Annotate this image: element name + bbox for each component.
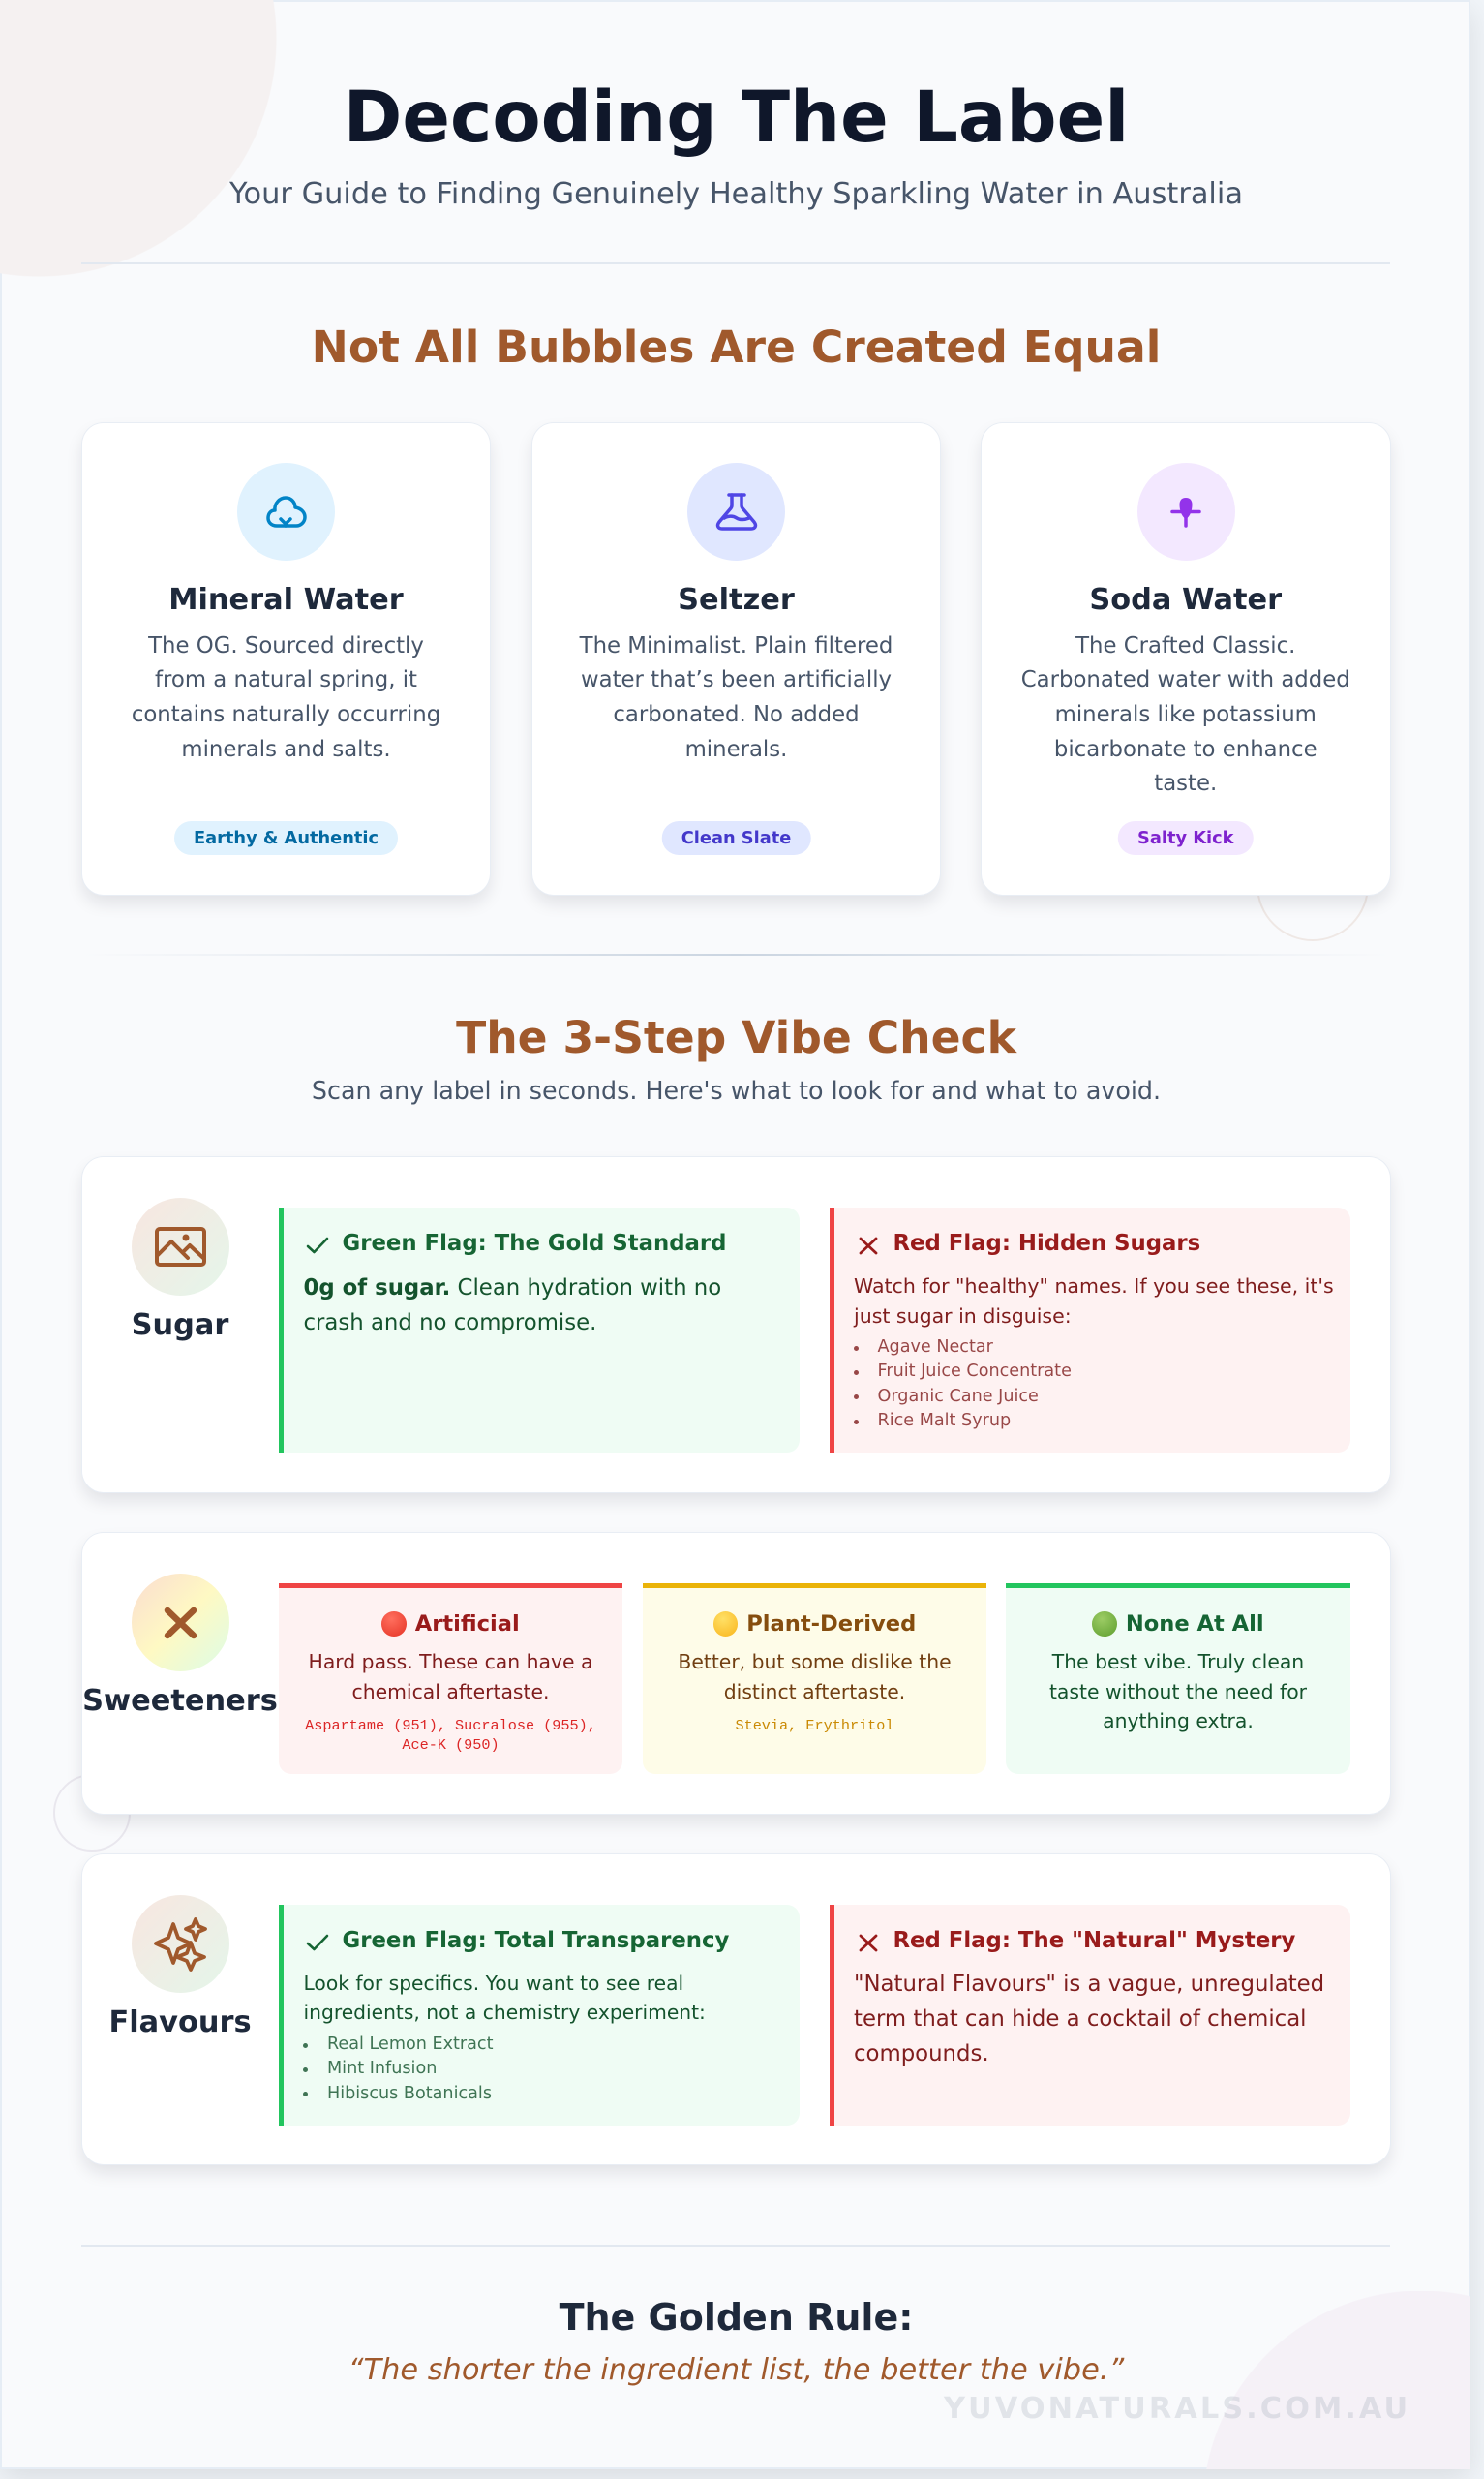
- icon: soda: [1136, 463, 1235, 561]
- row label: Sugar: [132, 1307, 228, 1342]
- flag text: [304, 1972, 706, 2024]
- section intro: Scan any label in seconds. Here's what to look for and what to avoid.: [312, 1076, 1161, 1105]
- card description: contains naturally occurring: [132, 702, 440, 727]
- flag text: 0g of sugar. Clean hydration with no: [304, 1275, 721, 1301]
- card description: [132, 633, 440, 762]
- icon: cross: [860, 1935, 877, 1952]
- flag text: [854, 1972, 1324, 2066]
- row label: Flavours: [108, 2005, 252, 2039]
- icon: cross: [132, 1574, 229, 1671]
- list: Hibiscus Botanicals: [327, 2084, 492, 2103]
- sub text: anything extra.: [1103, 1709, 1254, 1732]
- card title: Seltzer: [678, 583, 795, 616]
- tag: [174, 821, 398, 855]
- card description: water that’s been artificially: [581, 667, 892, 692]
- list: Fruit Juice Concentrate: [877, 1362, 1072, 1381]
- list: [854, 1337, 1072, 1430]
- decorative ring left: [52, 1774, 130, 1852]
- flag title: Green Flag: The Gold Standard: [343, 1231, 726, 1256]
- card description: minerals like potassium: [1055, 702, 1317, 727]
- card description: from a natural spring, it: [155, 667, 417, 692]
- list: [303, 2035, 494, 2103]
- icon: sparkles: [132, 1895, 229, 1993]
- panel: sugar: [82, 1157, 1390, 1492]
- tag: [661, 821, 811, 855]
- flag text: crash and no compromise.: [304, 1310, 596, 1335]
- flag text: Watch for "healthy" names. If you see these, it's: [854, 1274, 1334, 1298]
- icon: cloud: [237, 463, 335, 561]
- icon: check: [306, 1238, 329, 1253]
- list: Organic Cane Juice: [877, 1387, 1039, 1406]
- sub text: chemical aftertaste.: [352, 1680, 549, 1703]
- flag text: compounds.: [854, 2041, 989, 2066]
- tag: Salty Kick: [1137, 828, 1233, 848]
- plant-derived: [643, 1583, 986, 1774]
- decorative circle bottom right: [1203, 2291, 1470, 2469]
- list: Agave Nectar: [877, 1337, 993, 1357]
- card description: minerals.: [685, 737, 787, 762]
- heading: vibe check: The 3-Step Vibe Check: [456, 1011, 1016, 1063]
- flag title: Green Flag: Total Transparency: [343, 1928, 729, 1953]
- card description: bicarbonate to enhance: [1054, 737, 1317, 762]
- red flag: [829, 1905, 1350, 2126]
- decorative ring right: [1257, 829, 1369, 941]
- sub title: Artificial: [415, 1611, 520, 1637]
- card description: taste.: [1154, 771, 1217, 796]
- icon: flask: [687, 463, 785, 561]
- icon: cross: [860, 1238, 877, 1255]
- examples: [305, 1716, 596, 1754]
- flag text: Look for specifics. You want to see real: [304, 1972, 683, 1995]
- flag text: "Natural Flavours" is a vague, unregulated: [854, 1972, 1324, 1997]
- none at all: [1006, 1583, 1350, 1774]
- tag: Earthy & Authentic: [194, 828, 379, 848]
- subtitle: Your Guide to Finding Genuinely Healthy Sparkling Water in Australia: [229, 177, 1243, 211]
- panel: soda water: [982, 423, 1390, 895]
- flag title: Red Flag: Hidden Sugars: [893, 1231, 1200, 1256]
- card title: Soda Water: [1089, 583, 1282, 616]
- panel: mineral water: [82, 423, 490, 895]
- list: Rice Malt Syrup: [877, 1411, 1011, 1430]
- sub title: Plant-Derived: [746, 1611, 916, 1637]
- golden rule quote: “The shorter the ingredient list, the better the vibe.”: [348, 2353, 1124, 2387]
- card description: The OG. Sourced directly: [148, 633, 424, 658]
- sub title: None At All: [1126, 1611, 1264, 1637]
- card description: Carbonated water with added: [1021, 667, 1350, 692]
- flag text: just sugar in disguise:: [854, 1304, 1072, 1328]
- golden rule heading: The Golden Rule:: [560, 2296, 913, 2339]
- sub text: distinct aftertaste.: [724, 1680, 905, 1703]
- sub text: taste without the need for: [1049, 1680, 1307, 1703]
- tag: Clean Slate: [681, 828, 791, 848]
- panel: sweeteners: [82, 1533, 1390, 1814]
- sub text: [678, 1650, 952, 1703]
- flag text: term that can hide a cocktail of chemical: [854, 2006, 1307, 2032]
- sub text: Hard pass. These can have a: [309, 1650, 592, 1673]
- sub text: [309, 1650, 592, 1703]
- card description: The Crafted Classic.: [1075, 633, 1295, 658]
- heading: not all bubbles: Not All Bubbles Are Created Equal: [312, 321, 1161, 373]
- sub text: The best vibe. Truly clean: [1052, 1650, 1304, 1673]
- flag text: [854, 1274, 1334, 1328]
- card description: carbonated. No added: [613, 702, 860, 727]
- icon: check: [306, 1935, 329, 1950]
- flag title: Red Flag: The "Natural" Mystery: [893, 1928, 1295, 1953]
- card description: The Minimalist. Plain filtered: [580, 633, 893, 658]
- sub text: Better, but some dislike the: [678, 1650, 952, 1673]
- icon: image: [132, 1198, 229, 1296]
- card description: [579, 633, 893, 762]
- examples: Stevia, Erythritol: [735, 1716, 894, 1733]
- card title: Mineral Water: [168, 583, 404, 616]
- card description: minerals and salts.: [181, 737, 391, 762]
- title: Decoding The Label: [344, 77, 1129, 159]
- card description: [1021, 633, 1350, 796]
- panel: seltzer: [532, 423, 940, 895]
- examples: Ace-K (950): [402, 1736, 500, 1754]
- artificial: [279, 1583, 622, 1774]
- list: Mint Infusion: [327, 2059, 437, 2078]
- examples: Aspartame (951), Sucralose (955),: [305, 1716, 596, 1733]
- watermark: YUVONATURALS.COM.AU: [944, 2392, 1410, 2425]
- tag: [1118, 821, 1254, 855]
- sub text: [1049, 1650, 1307, 1732]
- list: Real Lemon Extract: [327, 2035, 494, 2054]
- red flag: [829, 1208, 1350, 1453]
- green flag: [279, 1208, 800, 1453]
- decorative circle top left: [0, 0, 277, 277]
- row label: Sweeteners: [82, 1683, 278, 1718]
- flag text: ingredients, not a chemistry experiment:: [304, 2001, 706, 2024]
- panel: flavours: [82, 1854, 1390, 2164]
- green flag: [279, 1905, 800, 2126]
- flag text: [304, 1275, 721, 1335]
